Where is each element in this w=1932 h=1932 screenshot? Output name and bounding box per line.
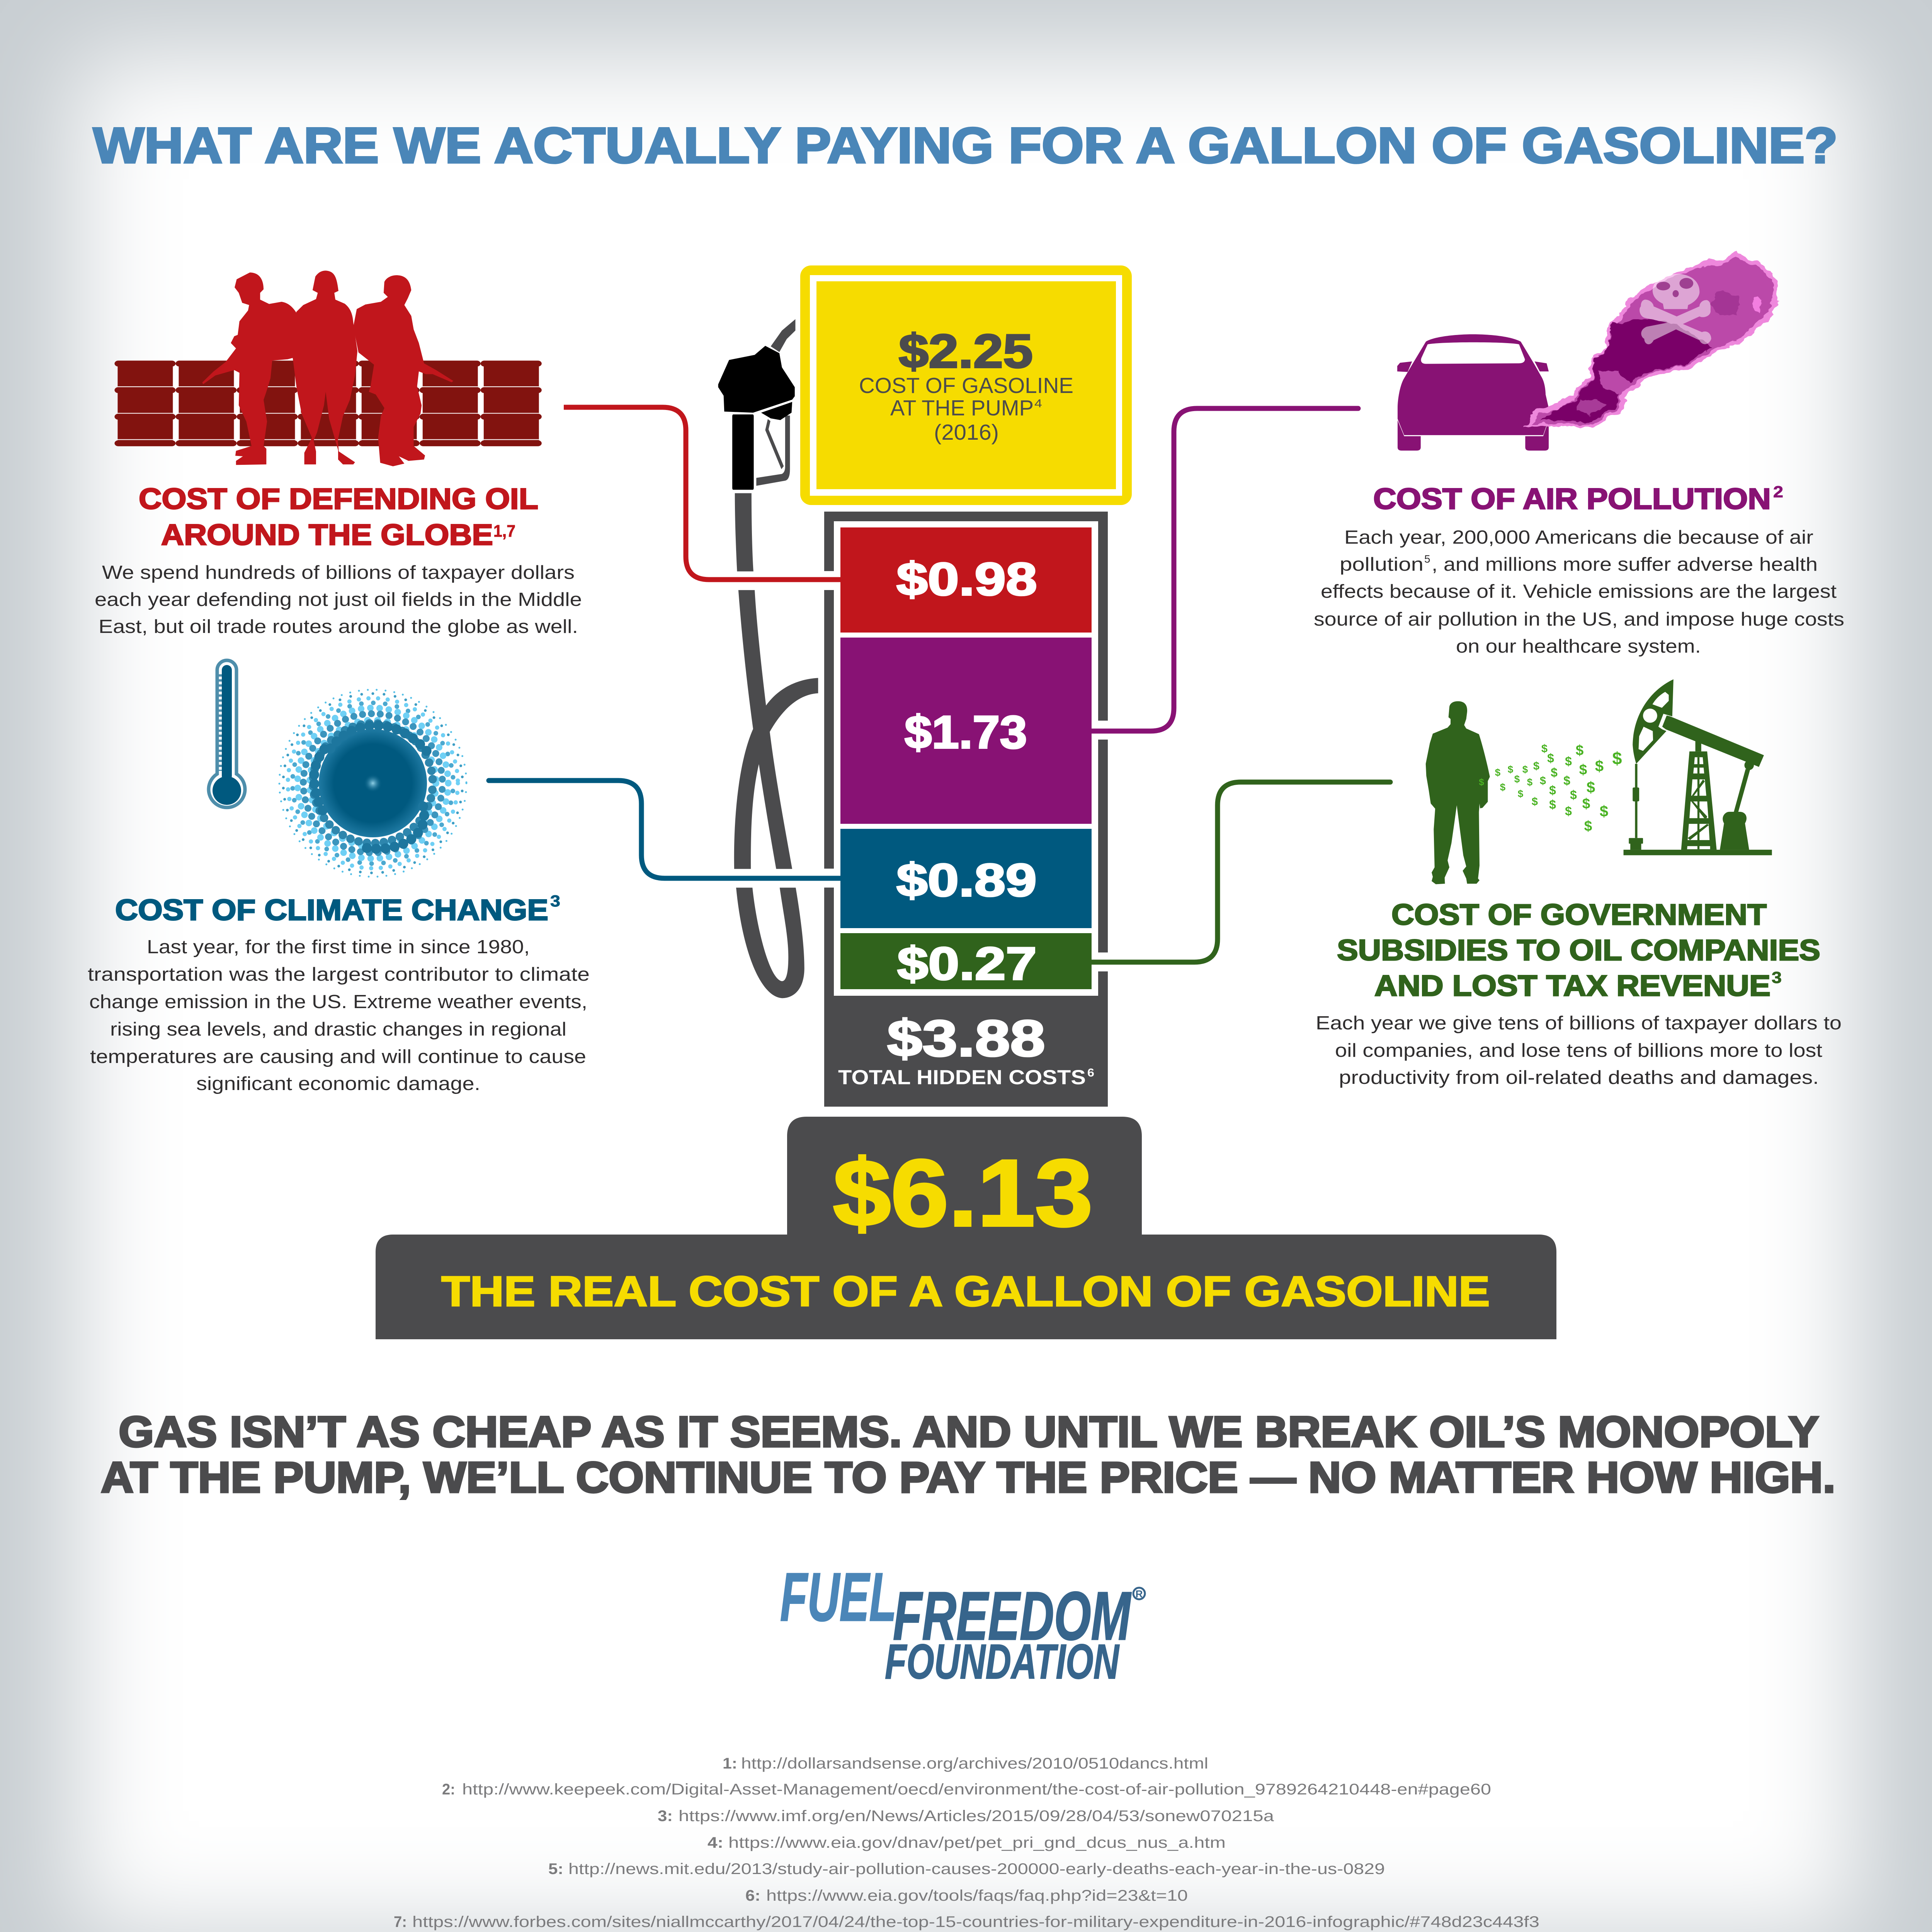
icon: dollar signs stream: $ (1565, 754, 1572, 768)
text: climate change body: transportation was the largest contributor to climate (88, 964, 590, 985)
icon: dollar signs stream: $ (1612, 748, 1622, 768)
bar: subsidies $0.27 (840, 933, 1092, 990)
connector: air pollution (1092, 408, 1358, 731)
panel: gasoline pump price sign (800, 265, 1132, 505)
icon: fuel nozzle and hose (718, 319, 818, 998)
logo: Fuel Freedom Foundation: FOUNDATION (885, 1634, 1120, 1689)
footnotes: http://www.keepeek.com/Digital-Asset-Management/oecd/environment/the-cost-of-air-pollution_9789264210448-en#page60 (462, 1781, 1491, 1798)
heading: climate change: COST OF CLIMATE CHANGE (115, 894, 548, 927)
icon: oil barrels (114, 361, 542, 446)
panel: cost of defending oil (95, 270, 582, 637)
footnotes: 2: (442, 1781, 455, 1798)
footnotes: 3: (658, 1808, 673, 1825)
heading: climate change: 3 (550, 892, 560, 910)
text: climate change body (88, 937, 590, 1094)
icon: dollar signs stream: $ (1527, 776, 1533, 788)
text: defending oil body: We spend hundreds of billions of taxpayer dollars (102, 562, 575, 583)
connector: government subsidies (1092, 782, 1390, 962)
heading: government subsidies (1337, 898, 1820, 1002)
price: $6.13: $6.13 (833, 1140, 1093, 1246)
text: air pollution body: effects because of it. Vehicle emissions are the largest (1321, 581, 1837, 602)
icon: dollar signs stream: $ (1514, 773, 1520, 785)
footnotes: 5: (548, 1861, 563, 1878)
text: air pollution body: pollution (1340, 554, 1423, 575)
icon: dollar signs stream: $ (1584, 818, 1592, 834)
icon: car (1397, 334, 1549, 451)
panel: real cost total (376, 1117, 1556, 1339)
text: air pollution body: 5 (1424, 553, 1430, 565)
closing statement: AT THE PUMP, WE’LL CONTINUE TO PAY THE PRICE — NO MATTER HOW HIGH. (101, 1453, 1835, 1502)
heading: government subsidies: SUBSIDIES TO OIL COMPANIES (1337, 934, 1820, 967)
text: government subsidies body: oil companies, and lose tens of billions more to lost (1335, 1040, 1822, 1061)
footnotes: 6: (745, 1887, 760, 1904)
icon: dollar signs stream: $ (1547, 751, 1554, 765)
icon: dollar signs stream: $ (1500, 781, 1506, 793)
panel: hidden cost column (824, 512, 1108, 1107)
label: cost of gasoline at the pump: 4 (1034, 397, 1042, 410)
icon: dollar signs stream: $ (1549, 783, 1556, 797)
heading: air pollution: 2 (1773, 483, 1783, 501)
text: defending oil body (95, 562, 582, 637)
icon: dollar signs stream: $ (1508, 764, 1514, 775)
icon: dollar signs stream: $ (1576, 742, 1584, 758)
label: total hidden costs: TOTAL HIDDEN COSTS (838, 1066, 1086, 1089)
icon: dollar signs stream (1479, 742, 1622, 834)
logo: Fuel Freedom Foundation (780, 1559, 1145, 1689)
text: air pollution body (1314, 527, 1844, 657)
total: $3.88: $3.88 (887, 1010, 1045, 1067)
panel: cost of government subsidies (1316, 679, 1842, 1088)
icon: dollar signs stream: $ (1532, 796, 1538, 808)
icon: dollar signs stream: $ (1533, 760, 1539, 772)
heading: government subsidies: COST OF GOVERNMENT (1391, 898, 1767, 931)
footnotes: 7: (394, 1913, 407, 1930)
label: cost of gasoline at the pump: AT THE PUMP (890, 396, 1034, 420)
logo: Fuel Freedom Foundation: FREEDOM (893, 1578, 1131, 1654)
footnotes (394, 1755, 1539, 1930)
icon: dollar signs stream: $ (1540, 775, 1546, 787)
footnotes: 4: (707, 1834, 723, 1851)
text: air pollution body: , and millions more suffer adverse health (1432, 554, 1818, 575)
text: climate change body: temperatures are causing and will continue to cause (90, 1046, 586, 1067)
logo: Fuel Freedom Foundation: R (1136, 1588, 1143, 1600)
icon: dollar signs stream: $ (1518, 788, 1524, 799)
icon: dollar signs stream: $ (1570, 788, 1577, 802)
text: government subsidies body (1316, 1013, 1842, 1088)
icon: three soldiers (202, 270, 453, 466)
icon: dollar signs stream: $ (1582, 796, 1590, 811)
bar: climate change $0.89: $0.89 (896, 854, 1037, 906)
panel: cost of climate change (88, 660, 590, 1094)
closing statement: GAS ISN’T AS CHEAP AS IT SEEMS. AND UNTIL WE BREAK OIL’S MONOPOLY (119, 1408, 1819, 1456)
heading: government subsidies: 3 (1772, 968, 1782, 986)
price: $2.25: $2.25 (899, 325, 1033, 378)
icon: dollar signs stream: $ (1541, 743, 1548, 755)
bar: subsidies $0.27: $0.27 (897, 938, 1037, 990)
text: defending oil body: each year defending not just oil fields in the Middle (95, 589, 582, 610)
icon: dollar signs stream: $ (1595, 758, 1604, 775)
text: air pollution body: source of air pollution in the US, and impose huge costs (1314, 609, 1844, 630)
text: air pollution body: on our healthcare system. (1456, 636, 1701, 657)
footnotes: http://news.mit.edu/2013/study-air-pollution-causes-200000-early-deaths-each-year-in-the-us-0829 (568, 1861, 1385, 1878)
heading: defending oil: COST OF DEFENDING OIL (139, 483, 538, 515)
footnotes: http://dollarsandsense.org/archives/2010/0510dancs.html (741, 1755, 1208, 1772)
icon: hurricane (279, 690, 466, 877)
icon: dollar signs stream: $ (1587, 779, 1595, 796)
label: cost of gasoline at the pump: COST OF GASOLINE (859, 373, 1073, 398)
connector: climate change (489, 781, 840, 878)
footnotes: https://www.forbes.com/sites/niallmccarthy/2017/04/24/the-top-15-countries-for-military-expenditure-in-2016-infographic/#748d23c443f3 (412, 1913, 1539, 1930)
icon: dollar signs stream: $ (1563, 774, 1570, 787)
icon: dollar signs stream: $ (1495, 767, 1501, 778)
icon: oil pumpjack (1624, 679, 1772, 855)
label: the real cost of a gallon of gasoline: THE REAL COST OF A GALLON OF GASOLINE (441, 1268, 1490, 1315)
icon: smoke with skull and crossbones (1522, 252, 1778, 427)
icon: dollar signs stream: $ (1549, 798, 1556, 811)
footnotes: https://www.eia.gov/tools/faqs/faq.php?id=23&t=10 (766, 1887, 1188, 1904)
label: cost of gasoline at the pump (859, 373, 1073, 445)
icon: dollar signs stream: $ (1565, 804, 1572, 818)
footnotes: 1: (723, 1755, 737, 1772)
bar: air pollution $1.73: $1.73 (905, 706, 1027, 758)
logo: Fuel Freedom Foundation: FUEL (780, 1559, 896, 1635)
icon: dollar signs stream: $ (1479, 777, 1484, 787)
closing statement (101, 1408, 1835, 1502)
text: climate change body: rising sea levels, and drastic changes in regional (110, 1019, 566, 1040)
title: WHAT ARE WE ACTUALLY PAYING FOR A GALLON OF GASOLINE? (93, 117, 1838, 173)
text: defending oil body: East, but oil trade routes around the globe as well. (99, 616, 578, 637)
icon: thermometer (209, 660, 245, 808)
icon: dollar signs stream: $ (1600, 803, 1608, 820)
bar: climate change $0.89 (840, 829, 1092, 928)
bar: air pollution $1.73 (840, 638, 1092, 824)
bar: defending oil $0.98: $0.98 (896, 553, 1037, 605)
text: government subsidies body: Each year we give tens of billions of taxpayer dollars to (1316, 1013, 1842, 1034)
connector: defending oil (564, 407, 840, 580)
footnotes: https://www.eia.gov/dnav/pet/pet_pri_gnd_dcus_nus_a.htm (728, 1834, 1226, 1851)
label: cost of gasoline at the pump: (2016) (934, 420, 999, 445)
text: government subsidies body: productivity from oil-related deaths and damages. (1339, 1067, 1819, 1088)
heading: defending oil: AROUND THE GLOBE (161, 519, 493, 551)
heading: government subsidies: AND LOST TAX REVENUE (1374, 969, 1770, 1002)
icon: dollar signs stream: $ (1522, 764, 1528, 775)
icon: dollar signs stream: $ (1551, 765, 1558, 779)
icon: man silhouette (1426, 701, 1490, 884)
text: climate change body: Last year, for the first time in since 1980, (147, 937, 530, 957)
icon: dollar signs stream: $ (1579, 762, 1587, 777)
heading: air pollution: COST OF AIR POLLUTION (1373, 483, 1771, 515)
label: total hidden costs: 6 (1087, 1066, 1094, 1079)
heading: defending oil (139, 483, 538, 551)
panel: cost of air pollution (1314, 252, 1844, 657)
heading: defending oil: 1,7 (493, 522, 515, 541)
bar: defending oil $0.98 (840, 527, 1092, 633)
text: air pollution body: Each year, 200,000 Americans die because of air (1344, 527, 1813, 548)
footnotes: https://www.imf.org/en/News/Articles/2015/09/28/04/53/sonew070215a (679, 1808, 1274, 1825)
text: climate change body: change emission in the US. Extreme weather events, (89, 992, 587, 1012)
text: climate change body: significant economic damage. (196, 1073, 480, 1094)
